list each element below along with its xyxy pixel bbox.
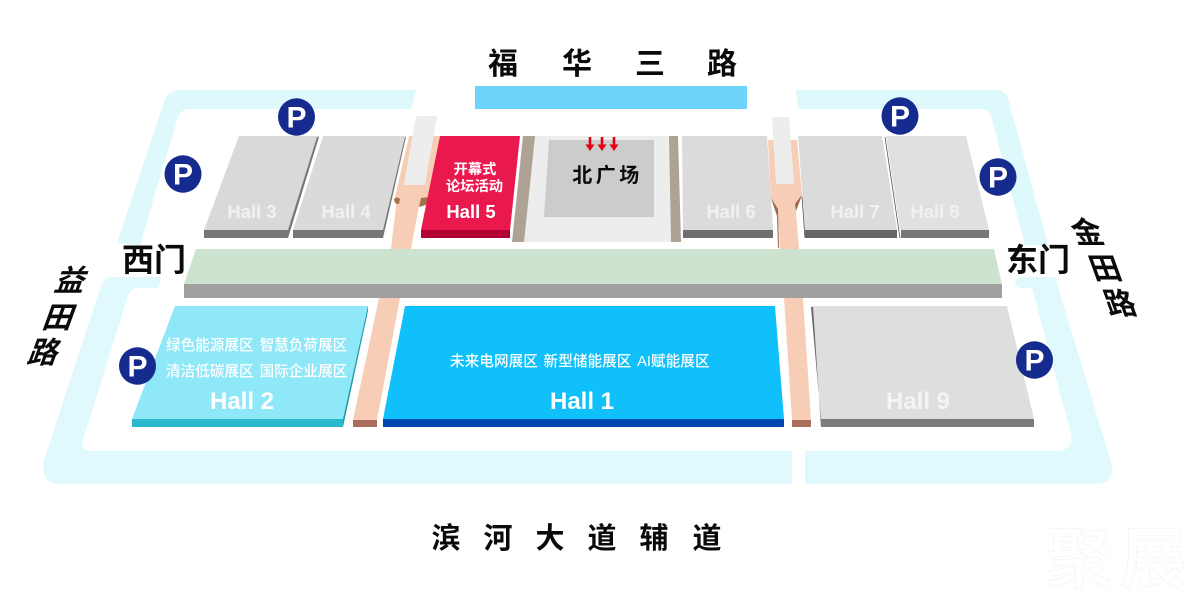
north plaza label: 北广场 (572, 164, 643, 187)
road: bottom-left perimeter (43, 277, 792, 484)
parking icon: hall 2: P (127, 350, 148, 384)
parking icon: west (164, 155, 202, 193)
hall 2 zones row 2: 清洁低碳展区 国际企业展区 (166, 362, 347, 380)
hall 5 forum label: 论坛活动 (446, 177, 503, 195)
east road label (1066, 216, 1141, 321)
north road label (488, 48, 737, 81)
parking icon: west: P (173, 158, 193, 192)
east gate label: 东门 (1006, 242, 1070, 278)
road: north road bar (475, 86, 747, 109)
hall 5 label: 开幕式 (454, 161, 496, 178)
south road label: 滨 (431, 522, 461, 555)
hall 9 (811, 306, 1034, 427)
parking icon: top right: P (890, 100, 910, 134)
parking icon: hall 9: P (1024, 344, 1045, 378)
hall 5 (421, 136, 520, 238)
road: top-left perimeter (117, 90, 416, 245)
hall 1 zones: 未来电网展区 新型储能展区 AI赋能展区 (450, 353, 710, 370)
watermark: 聚展 (1046, 522, 1194, 594)
hall 7 (798, 136, 897, 238)
parking icon: east (980, 158, 1016, 196)
west road label (24, 264, 93, 370)
hall 2 (132, 306, 368, 427)
parking icon: top right (882, 97, 918, 135)
parking icon: hall 2 (119, 347, 156, 385)
walkway: right peach corridor (768, 118, 811, 427)
west road label: 路 (24, 336, 66, 370)
south road label: 大 (535, 522, 565, 555)
hall 7: Hall 7 (830, 201, 880, 222)
east road label: 路 (1099, 287, 1141, 321)
hall 1 (383, 306, 784, 427)
road: top-right perimeter (796, 90, 1048, 245)
hall 4 (293, 136, 406, 238)
south road label: 道 (587, 522, 617, 555)
hall 3 (204, 136, 319, 238)
hall 2 zones row 1: 绿色能源展区 智慧负荷展区 (166, 336, 347, 354)
north road label: 三 (635, 48, 665, 81)
parking icon: east: P (988, 162, 1008, 194)
west road label: 田 (39, 301, 81, 335)
hall 8: Hall 8 (910, 201, 960, 222)
walkway: left peach corridor (353, 117, 440, 427)
hall 6: Hall 6 (706, 201, 756, 222)
hall 4: Hall 4 (321, 201, 371, 222)
east road label: 田 (1084, 252, 1126, 286)
hall 8 (885, 136, 989, 238)
west road label: 益 (51, 264, 93, 298)
hall 1 name: Hall 1 (550, 388, 614, 415)
west gate label: 西门 (122, 242, 186, 278)
parking icon: hall 9 (1016, 341, 1053, 379)
hall 5 name: Hall 5 (446, 201, 496, 222)
parking icon: top left (278, 98, 315, 136)
north plaza (512, 136, 681, 242)
hall 2 name: Hall 2 (210, 388, 274, 415)
north road label: 路 (707, 48, 737, 81)
north road label: 华 (562, 48, 592, 81)
east road label: 金 (1066, 216, 1108, 250)
north road label: 福 (488, 48, 518, 81)
south road label (431, 522, 722, 555)
hall 6 (682, 136, 773, 238)
central green concourse (184, 249, 1002, 298)
south road label: 道 (692, 522, 722, 555)
south road label: 辅 (639, 522, 669, 555)
hall 3: Hall 3 (227, 201, 277, 222)
hall 9: Hall 9 (886, 388, 950, 415)
parking icon: top left: P (286, 102, 307, 134)
icon: red arrows (586, 137, 618, 151)
south road label: 河 (483, 522, 513, 555)
road: bottom-right perimeter (805, 277, 1112, 484)
